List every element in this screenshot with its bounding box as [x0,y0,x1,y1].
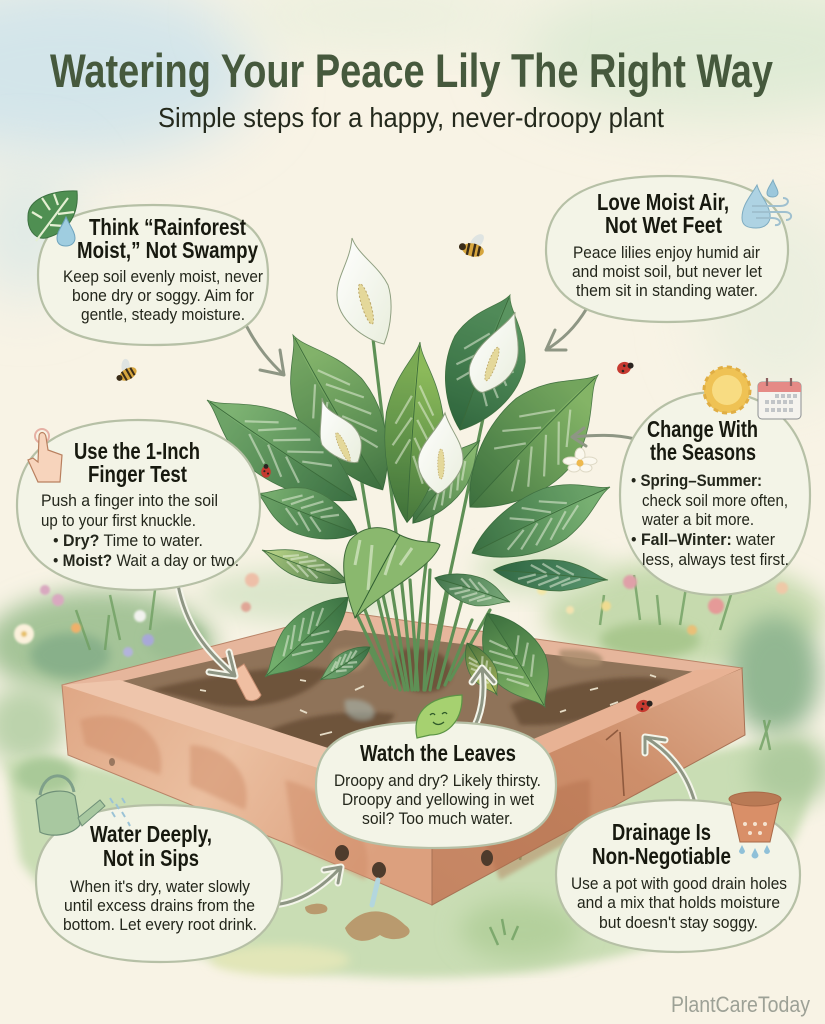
panel: watch the leaves [316,695,556,848]
body text: • Fall–Winter: water [631,530,775,549]
water drip and mud [305,880,410,941]
leaf: lower right [463,599,569,722]
body text: gentle, steady moisture. [81,305,245,324]
heading [592,819,731,869]
body text: bottom. Let every root drink. [63,915,257,934]
heading: Love Moist Air, [597,189,729,215]
icon: pointing hand [28,429,62,482]
heading [90,821,212,871]
heading: the Seasons [650,439,756,465]
body text: less, always test first. [642,550,789,569]
bee: left [109,355,139,385]
body text: soil? Too much water. [362,809,513,828]
daisy [563,448,597,472]
leaf: center right [430,564,514,616]
flower: left [320,398,361,463]
icon: smiling leaf [416,695,462,738]
bed: front right wall [432,668,745,905]
heading: Finger Test [88,461,187,487]
body text: until excess drains from the [64,896,255,915]
heading: Drainage Is [612,819,711,845]
heading: Non-Negotiable [592,843,731,869]
heading: Change With [647,416,758,442]
body text: • Spring–Summer: [631,471,762,490]
leaf: small low [314,638,376,688]
body text: Droopy and yellowing in wet [342,790,534,809]
panel: finger test [17,420,260,590]
body text: Push a finger into the soil [41,491,218,510]
leaf: right lower [460,462,622,579]
heading: Use the 1-Inch [74,438,200,464]
panel: drainage [556,792,800,952]
leaf: far left [189,372,375,527]
body text: Peace lilies enjoy humid air [573,243,760,262]
flower: center [418,413,463,494]
body text: When it's dry, water slowly [70,877,250,896]
body text [41,491,239,570]
body text [63,877,257,934]
icon: sun [704,367,750,413]
body text [571,874,787,932]
heading: Watch the Leaves [360,740,516,766]
body text [631,471,789,569]
leaf: right large [439,345,630,538]
heading: Not in Sips [103,845,199,871]
panel: think rainforest moist [28,191,268,345]
body text [63,267,263,324]
body text: check soil more often, [642,491,788,510]
ladybug: bed rim [634,697,654,714]
panel: change with seasons [620,367,810,595]
panel: water deeply [36,776,282,962]
leaf: left lower [249,471,366,554]
subtitle: Simple steps for a happy, never-droopy plant [158,102,664,133]
body text: bone dry or soggy. Aim for [72,286,254,305]
raised brick garden bed [62,612,745,941]
ladybug: left [261,464,271,478]
icon: calendar [758,378,801,419]
plant: peace lily [189,238,630,722]
icon: watering can [36,776,130,835]
arrow: water deeply to drain [268,867,341,905]
arrow: finger test to soil [178,585,235,676]
leaf: back right dark [424,282,547,444]
body text: Droopy and dry? Likely thirsty. [334,771,541,790]
meadow and grass wash [0,544,825,978]
bed: back rim [62,612,742,695]
arrow: moist air to plant [546,308,587,350]
arrow: rainforest to plant [247,327,284,375]
flower: right [469,312,518,392]
bed: front left wall [62,685,432,905]
flower: top [337,238,391,344]
leaf: lower left [250,582,363,692]
heading: Moist,” Not Swampy [77,237,258,263]
icon: terracotta pot [729,792,781,858]
leaf: behind flower [399,429,494,535]
plant: stems [350,330,490,690]
body text: Keep soil evenly moist, never [63,267,263,286]
leaf: center [378,340,450,525]
leaf: large heart-shaped front [344,528,440,618]
body text [334,771,541,828]
body text: but doesn't stay soggy. [599,913,758,932]
body text: water a bit more. [641,510,754,529]
finger in soil [232,664,261,701]
leaf: yellowing [456,637,508,701]
leaf: pale left [258,538,352,594]
body text: • Dry? Time to water. [53,531,203,550]
bed: drain holes [109,758,493,878]
ladybug: right [615,359,635,376]
arrow: seasons to plant [572,428,635,446]
body text: • Moist? Wait a day or two. [53,551,239,570]
body text: up to your first knuckle. [41,511,196,530]
body text: and moist soil, but never let [572,262,762,281]
icon: monstera leaf [28,191,77,241]
heading: Water Deeply, [90,821,212,847]
leaf: back left [260,315,416,509]
heading: Think “Rainforest [89,214,246,240]
icon: drop and wind [742,180,791,228]
body text: Use a pot with good drain holes [571,874,787,893]
bed: soil [118,630,696,795]
heading [647,416,758,465]
watermark: PlantCareToday [671,992,810,1017]
heading [74,438,200,487]
body text [572,243,762,300]
panel: love moist air [546,176,791,322]
arrow: drainage to bed [645,737,697,812]
heading [77,214,258,263]
arrow: watch the leaves [471,668,494,733]
heading: Not Wet Feet [605,212,722,238]
body text: and a mix that holds moisture [577,893,780,912]
bee: top [457,228,488,259]
heading [597,189,729,238]
leaf: dark right low [492,555,609,596]
body text: them sit in standing water. [576,281,758,300]
icon: water drop [57,217,75,246]
insects and small flower [109,228,654,714]
